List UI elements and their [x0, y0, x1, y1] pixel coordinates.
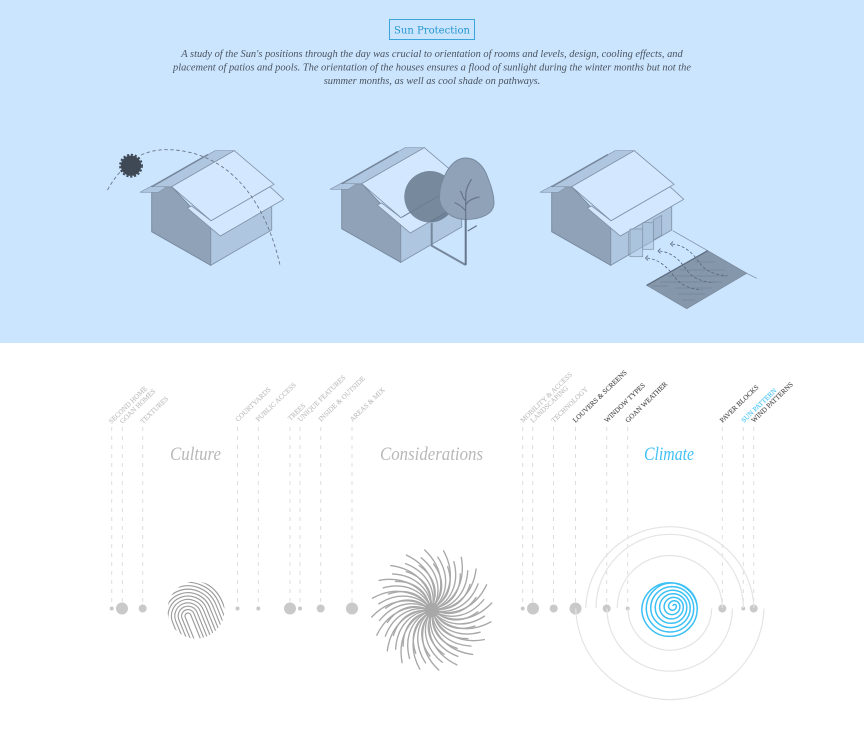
- labels: considerations topics: TREES: [286, 402, 307, 422]
- labels: considerations topics: [234, 374, 387, 423]
- text block: introduction: placement of patios and pools. The orientation of the houses ensures a flood of sunlight during the winter months but not the: [172, 62, 691, 74]
- illustration: house with sun path: [108, 150, 284, 265]
- labels: considerations topics: AREAS & MIX: [348, 386, 387, 423]
- dashed guide lines: [112, 427, 754, 606]
- panel: white lower background: [0, 343, 864, 743]
- labels: climate topics: PAVER BLOCKS: [718, 383, 760, 424]
- panel: sky blue header background: [0, 0, 864, 343]
- chart: considerations hair burst: [372, 550, 492, 670]
- labels: culture topics: TEXTURES: [139, 395, 170, 425]
- illustration: house with tree shade: [330, 148, 494, 265]
- labels: culture topics: SECOND HOME: [107, 385, 149, 425]
- labels: climate topics: SUN PATTERN: [740, 387, 778, 424]
- labels: considerations topics: PUBLIC ACCESS: [254, 381, 298, 423]
- labels: climate topics: WIND PATTERNS: [750, 381, 795, 424]
- chart: climate concentric arcs: [576, 527, 764, 700]
- labels: culture topics: GOAN HOMES: [118, 387, 157, 425]
- labels: considerations topics: COURTYARDS: [234, 385, 273, 423]
- chart: climate blue spiral: [642, 583, 697, 636]
- title: Sun Protection: [390, 20, 474, 40]
- labels: climate topics: TECHNOLOGY: [550, 385, 590, 424]
- labels: climate topics: LANDSCAPING: [529, 384, 570, 424]
- text block: introduction: A study of the Sun's positions through the day was crucial to orientation of rooms and levels, design, cooling effects, and: [180, 49, 684, 60]
- labels: climate topics: LOUVERS & SCREENS: [571, 369, 629, 424]
- labels: climate topics: MOBILITY & ACCESS: [519, 371, 574, 424]
- window panels: [628, 216, 662, 257]
- labels: climate topics: WINDOW TYPES: [603, 381, 647, 424]
- heading: Considerations: Considerations: [380, 444, 483, 465]
- chart: culture fingerprint: [168, 582, 224, 638]
- labels: culture topics: [107, 385, 170, 425]
- icon: sun: [120, 155, 142, 177]
- labels: considerations topics: UNIQUE FEATURES: [296, 374, 347, 423]
- labels: climate topics: [519, 369, 795, 424]
- labels: considerations topics: INSIDE & OUTSIDE: [317, 375, 367, 423]
- labels: climate topics: GOAN WEATHER: [624, 380, 669, 424]
- text block: introduction: [172, 49, 691, 87]
- heading: Culture: Culture: [170, 444, 221, 465]
- arrows: wind paths: [646, 242, 727, 290]
- text block: introduction: summer months, as well as cool shade on pathways.: [324, 76, 540, 87]
- shade on patio: [647, 251, 747, 309]
- heading: Climate: Climate: [644, 444, 694, 465]
- icon: tree: [440, 158, 494, 265]
- illustration: house with shaded patio: [540, 151, 757, 309]
- title: Sun Protection: Sun Protection: [394, 24, 470, 36]
- patio outline: [673, 231, 757, 278]
- timeline dots: [110, 602, 758, 614]
